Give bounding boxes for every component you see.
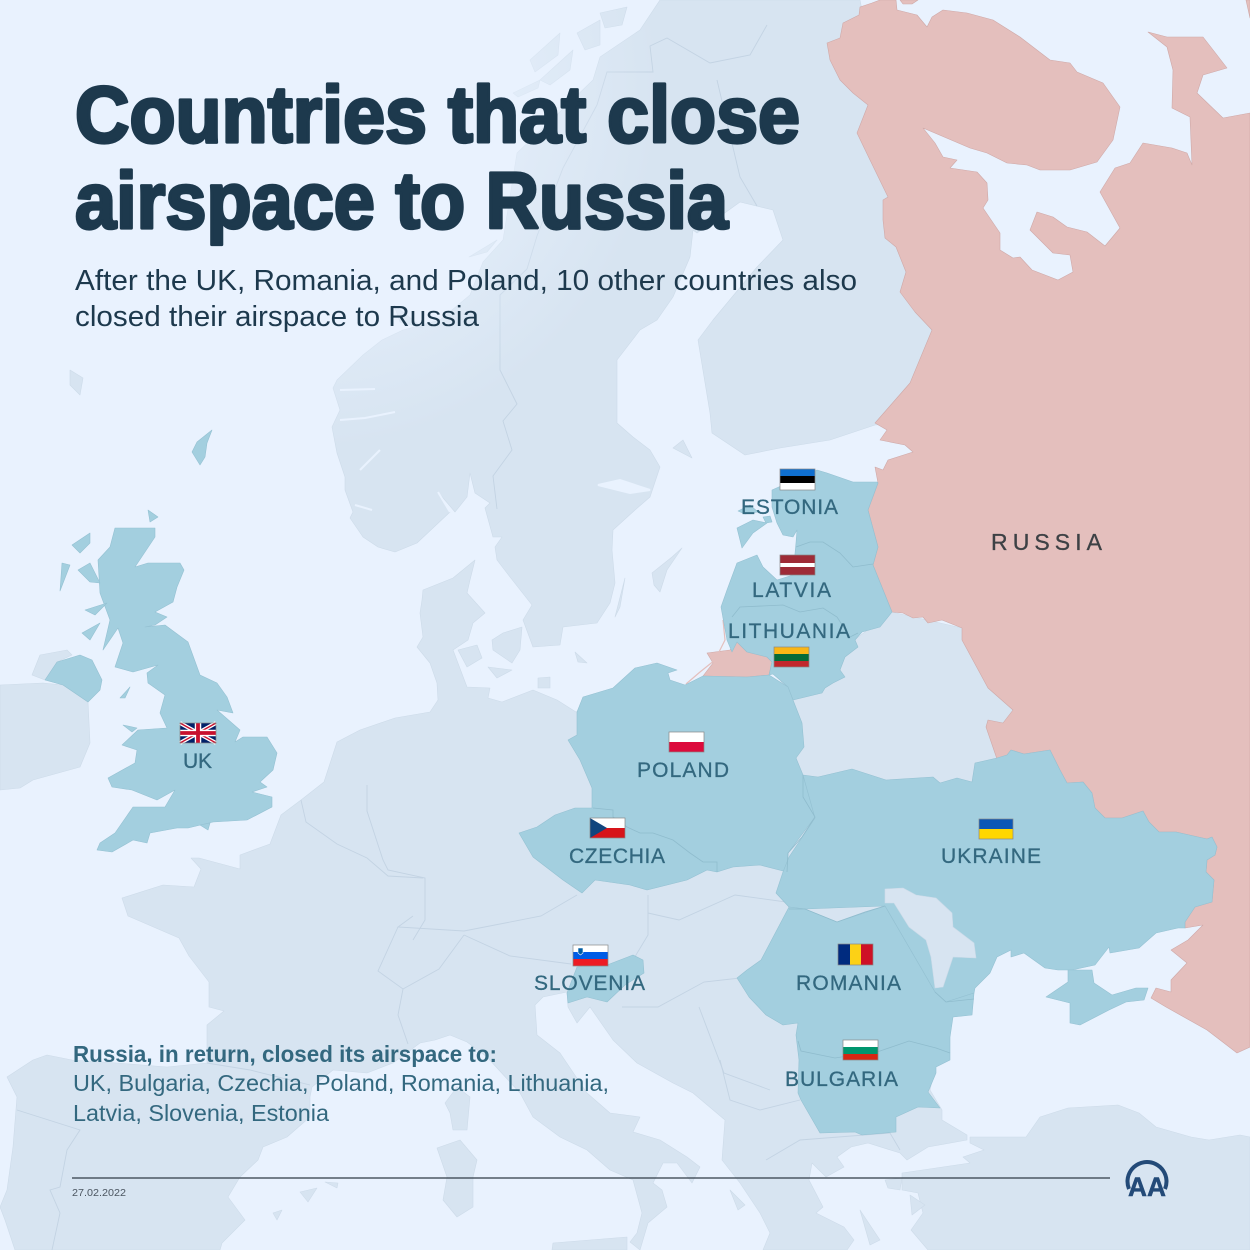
label and flag: Slovenia <box>534 945 645 995</box>
label and flag: Poland: POLAND <box>637 759 729 782</box>
label and flag: Latvia: LATVIA <box>752 579 831 602</box>
subtitle: closed their airspace to Russia <box>75 301 480 333</box>
label and flag: Slovenia: SLOVENIA <box>534 972 645 995</box>
label and flag: Estonia <box>741 469 838 519</box>
footer rule <box>72 1177 1110 1179</box>
continental Europe <box>0 560 1013 1250</box>
Scandinavia and Finland <box>332 0 945 647</box>
Northern Ireland <box>45 655 102 702</box>
Moldova <box>885 888 976 988</box>
flag: Latvia <box>780 555 815 575</box>
flag: Czechia <box>590 818 625 838</box>
label and flag: Czechia <box>569 818 665 868</box>
flag: Estonia <box>780 469 815 490</box>
label and flag: Czechia: CZECHIA <box>569 845 665 868</box>
Ireland <box>0 683 90 790</box>
top-left fade over the land <box>0 0 720 460</box>
label and flag: Ukraine <box>941 819 1041 868</box>
Turkey <box>902 1105 1250 1250</box>
date: 27.02.2022 <box>72 1187 126 1199</box>
Romania and Bulgaria <box>737 906 974 1135</box>
retaliation note <box>73 1041 609 1126</box>
Crimea <box>1046 970 1148 1025</box>
Ukraine <box>776 750 1217 1002</box>
Great Britain <box>97 528 277 852</box>
Norwegian coastal islands <box>70 7 627 395</box>
Greek islands <box>730 1178 925 1245</box>
label and flag: Poland <box>637 732 729 782</box>
subtitle <box>75 265 857 333</box>
land borders: neutral countries <box>17 25 900 1250</box>
flag: Poland <box>669 732 704 752</box>
retaliation note: UK, Bulgaria, Czechia, Poland, Romania, Lithuania, <box>73 1070 609 1096</box>
Slovenia <box>567 955 644 1003</box>
land: closed-airspace countries <box>45 430 1217 1135</box>
flag: Lithuania <box>774 647 809 667</box>
flag: Ukraine <box>979 819 1013 839</box>
retaliation note: Russia, in return, closed its airspace to: <box>73 1041 497 1067</box>
flag: Romania <box>838 944 873 965</box>
retaliation note: Latvia, Slovenia, Estonia <box>73 1100 329 1126</box>
Mediterranean islands <box>273 1087 627 1250</box>
title: airspace to Russia <box>75 156 728 245</box>
label and flag: Estonia: ESTONIA <box>741 496 838 519</box>
land: Russia <box>686 0 1250 1053</box>
title <box>75 70 800 245</box>
flag: Slovenia <box>573 945 608 966</box>
label: Russia: RUSSIA <box>991 529 1103 555</box>
label and flag: Romania: ROMANIA <box>796 972 901 995</box>
inland seas and fjords <box>340 389 650 512</box>
flag: Bulgaria <box>843 1040 878 1060</box>
Estonian islands <box>737 505 772 548</box>
label and flag: Lithuania: LITHUANIA <box>728 620 850 643</box>
flag: UK <box>180 723 216 743</box>
subtitle: After the UK, Romania, and Poland, 10 other countries also <box>75 265 857 297</box>
label and flag: Ukraine: UKRAINE <box>941 845 1041 868</box>
icon: Anadolu Agency logo: AA <box>1128 1172 1166 1202</box>
label and flag: Romania <box>796 944 901 995</box>
label and flag: Latvia <box>752 555 831 602</box>
label and flag: Lithuania <box>728 620 850 667</box>
title: Countries that close <box>75 70 800 159</box>
Baltic states <box>721 470 892 700</box>
label and flag: Bulgaria: BULGARIA <box>785 1068 898 1091</box>
Poland and Czechia <box>519 663 815 893</box>
Scottish and other UK islands <box>60 430 212 830</box>
label and flag: UK <box>180 723 216 773</box>
land borders: closed-airspace countries <box>593 542 974 1058</box>
Danish and Baltic islands <box>458 440 692 688</box>
label and flag: UK: UK <box>183 750 212 773</box>
label and flag: Bulgaria <box>785 1040 898 1091</box>
